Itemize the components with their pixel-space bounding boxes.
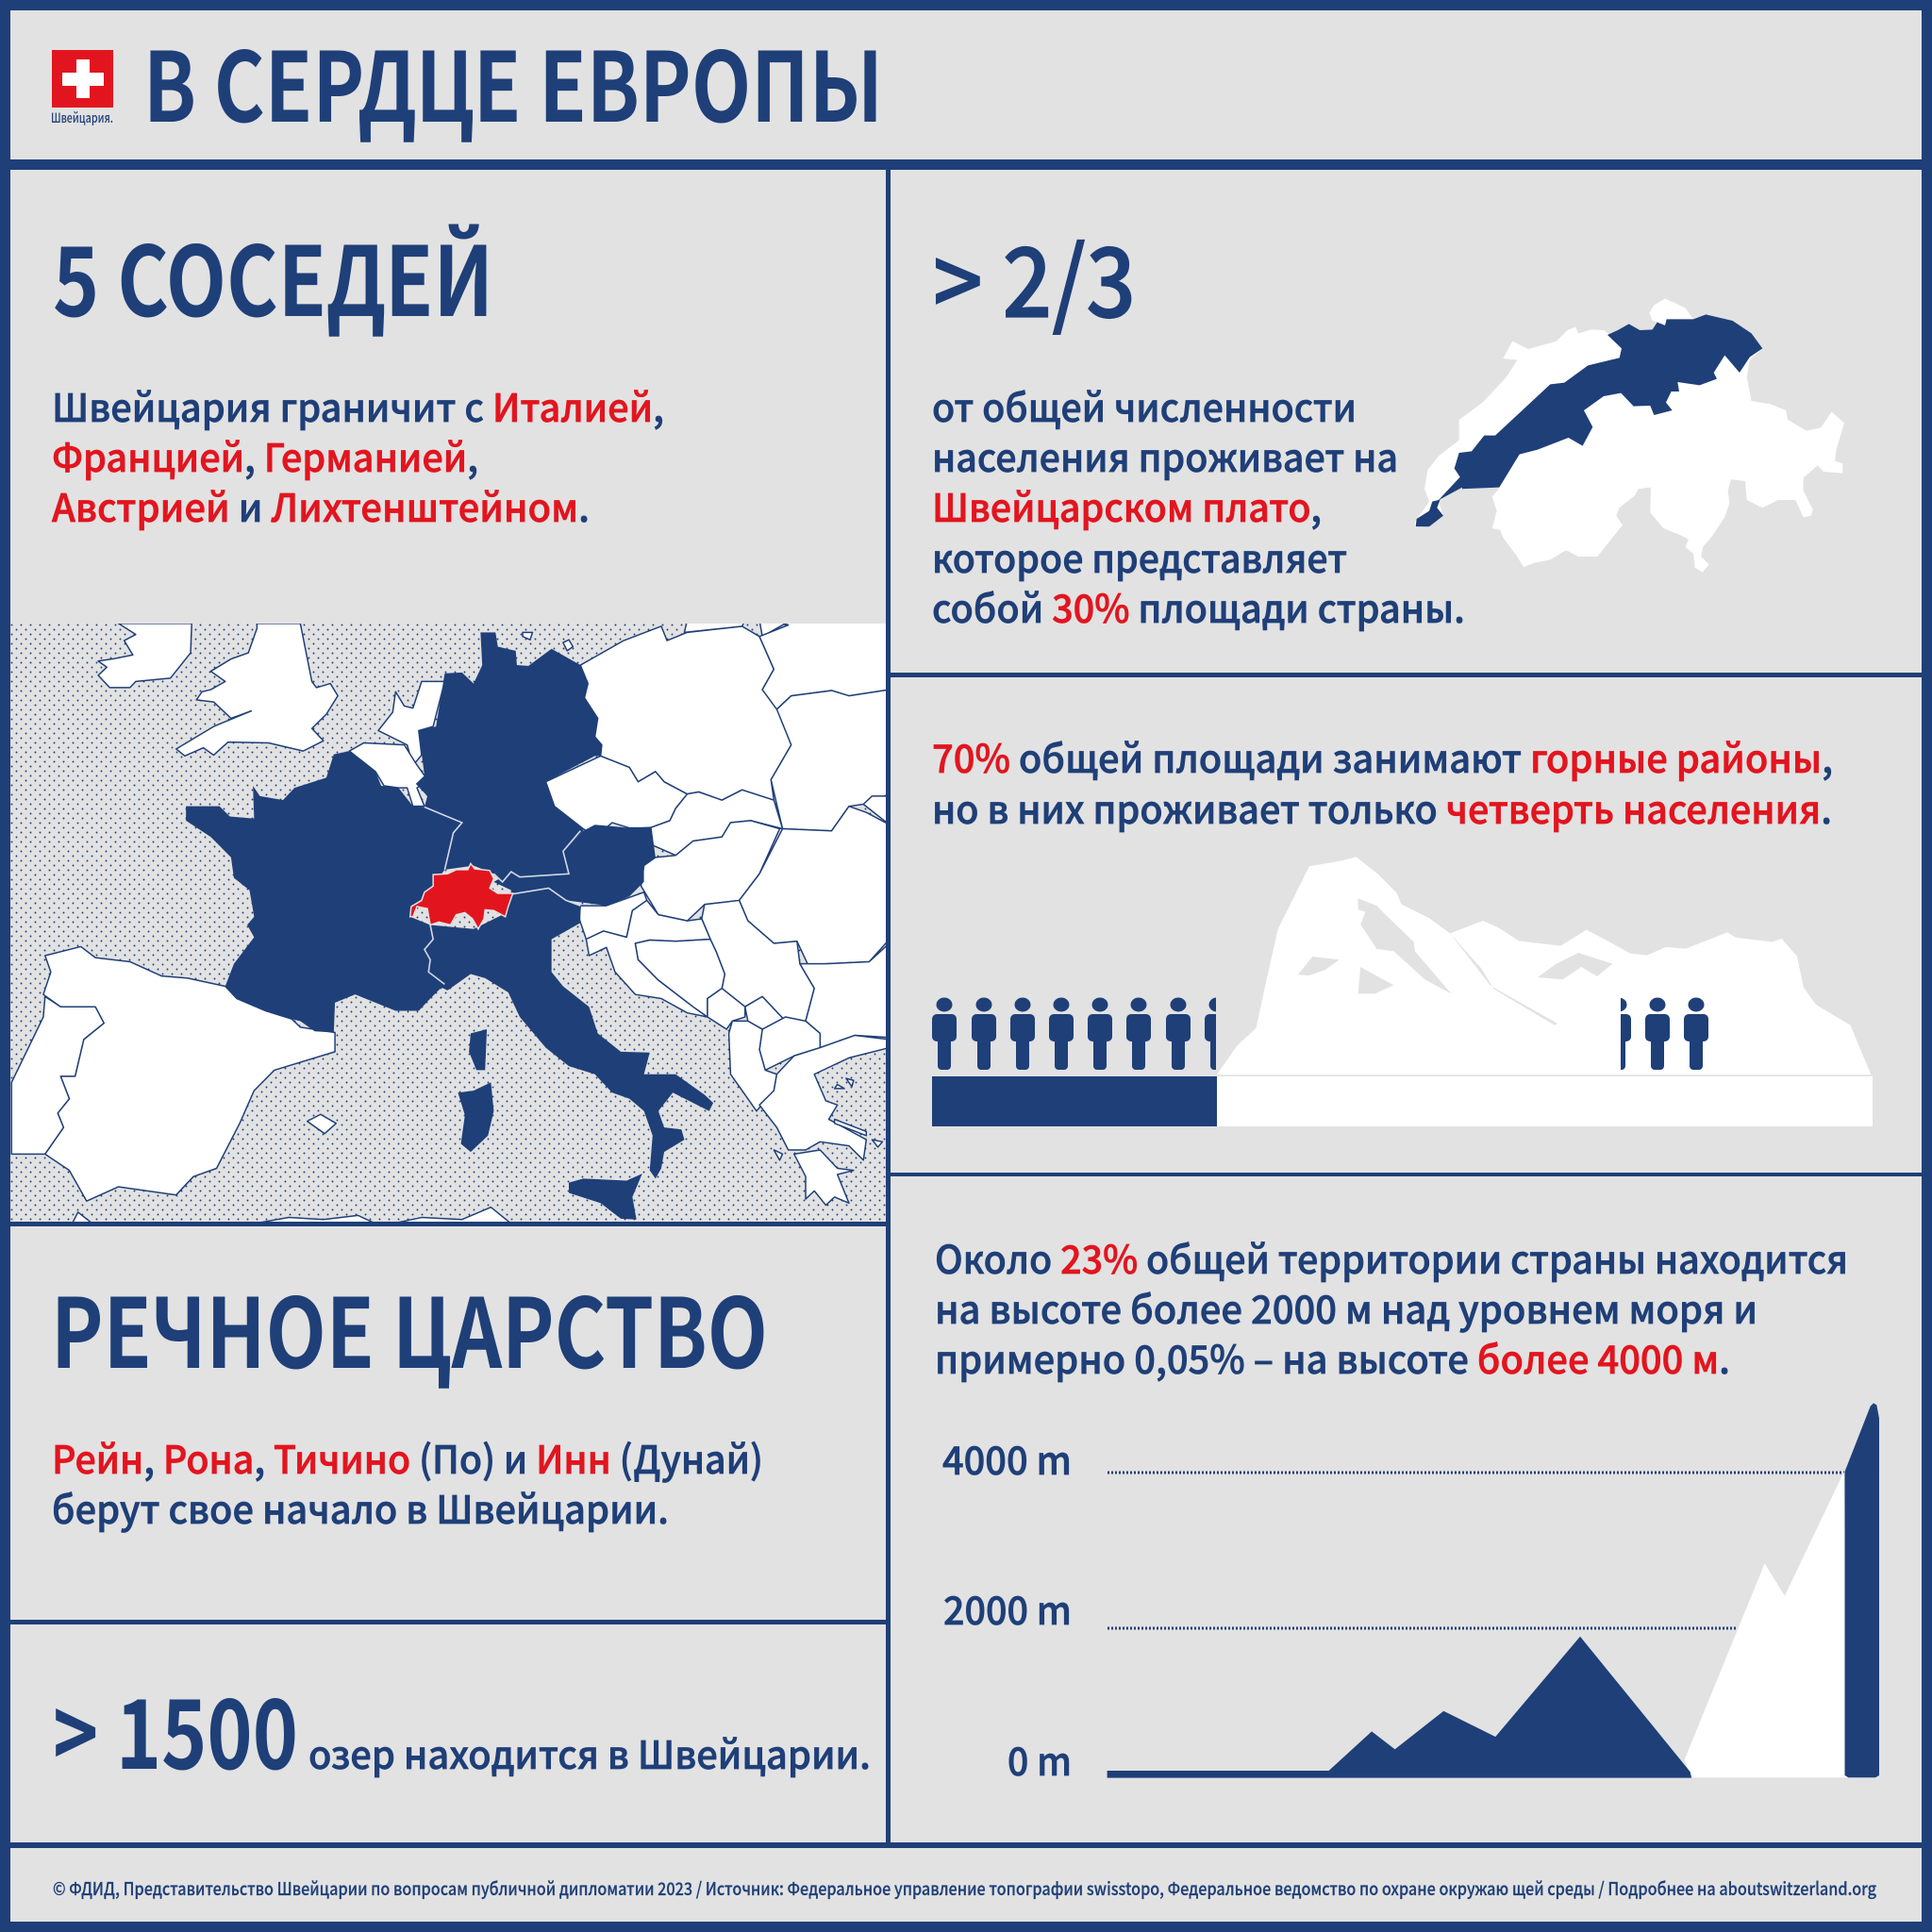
text: altitude description: примерно 0,05% – на высоте более 4000 м. [935,1328,1730,1385]
text: rivers: Рейн, Рона, Тичино (По) и Инн (Дунай) [52,1428,763,1485]
text: neighbours description: Францией, Германией, [52,426,478,483]
big number 2/3: > 2/3 [933,207,1136,345]
heading: river kingdom: РЕЧНОЕ ЦАРСТВО [51,1257,768,1396]
panel: more than 2/3 [932,207,1844,634]
text: rivers: берут свое начало в Швейцарии. [52,1478,669,1535]
text: plateau: Швейцарском плато, [932,476,1322,533]
panel: lakes [53,1658,871,1797]
Switzerland highlighted on map [410,863,513,929]
panel: altitude [935,1228,1879,1787]
text: plateau: которое представляет [932,527,1347,584]
people in the mountains [1621,998,1708,1070]
text: 70 percent: 70% общей площади занимают горные районы, [932,727,1833,784]
text: altitude description: Около 23% общей территории страны находится [935,1228,1848,1285]
text: 70 percent: но в них проживает только четверть населения. [932,778,1832,835]
altitude axis labels: 2000 m [943,1579,1072,1636]
text: rivers [52,1428,763,1535]
altitude chart silhouettes [1108,1403,1879,1777]
title: В СЕРДЦЕ ЕВРОПЫ [143,11,883,150]
text: plateau: от общей численности [932,376,1357,433]
text: plateau: населения проживает на [932,426,1398,483]
text: neighbours description [52,376,664,533]
text: neighbours description: Австрией и Лихтенштейном. [52,476,590,533]
map of Europe [10,620,890,1224]
big number 1500: > 1500 [53,1658,298,1797]
mountain illustration [1217,857,1871,1074]
text: 70 percent [932,727,1833,835]
panel: mountain regions [932,727,1873,1126]
altitude axis labels [942,1429,1072,1787]
panel: river kingdom [51,1257,768,1535]
heading: 5 neighbours: 5 СОСЕДЕЙ [53,206,493,344]
panel: 5 neighbours [52,206,664,533]
text: altitude description [935,1228,1848,1385]
text: plateau: собой 30% площади страны. [932,577,1465,634]
text: neighbours description: Швейцария граничит с Италией, [52,376,664,433]
map of Switzerland with plateau [1415,299,1844,573]
bar: plateau share [932,1076,1217,1126]
altitude axis labels: 4000 m [942,1429,1072,1486]
text: altitude description: на высоте более 2000 м над уровнем моря и [935,1278,1757,1335]
logo: Swiss flag: Швейцария. [51,108,113,127]
bar: mountain share [1217,1076,1873,1126]
text: lakes: озер находится в Швейцарии. [308,1724,871,1780]
text: plateau [932,376,1465,634]
altitude axis labels: 0 m [1008,1730,1072,1787]
logo: Swiss flag [51,50,113,127]
people on the plateau [932,998,1229,1070]
dotted altitude lines [1108,1473,1844,1628]
